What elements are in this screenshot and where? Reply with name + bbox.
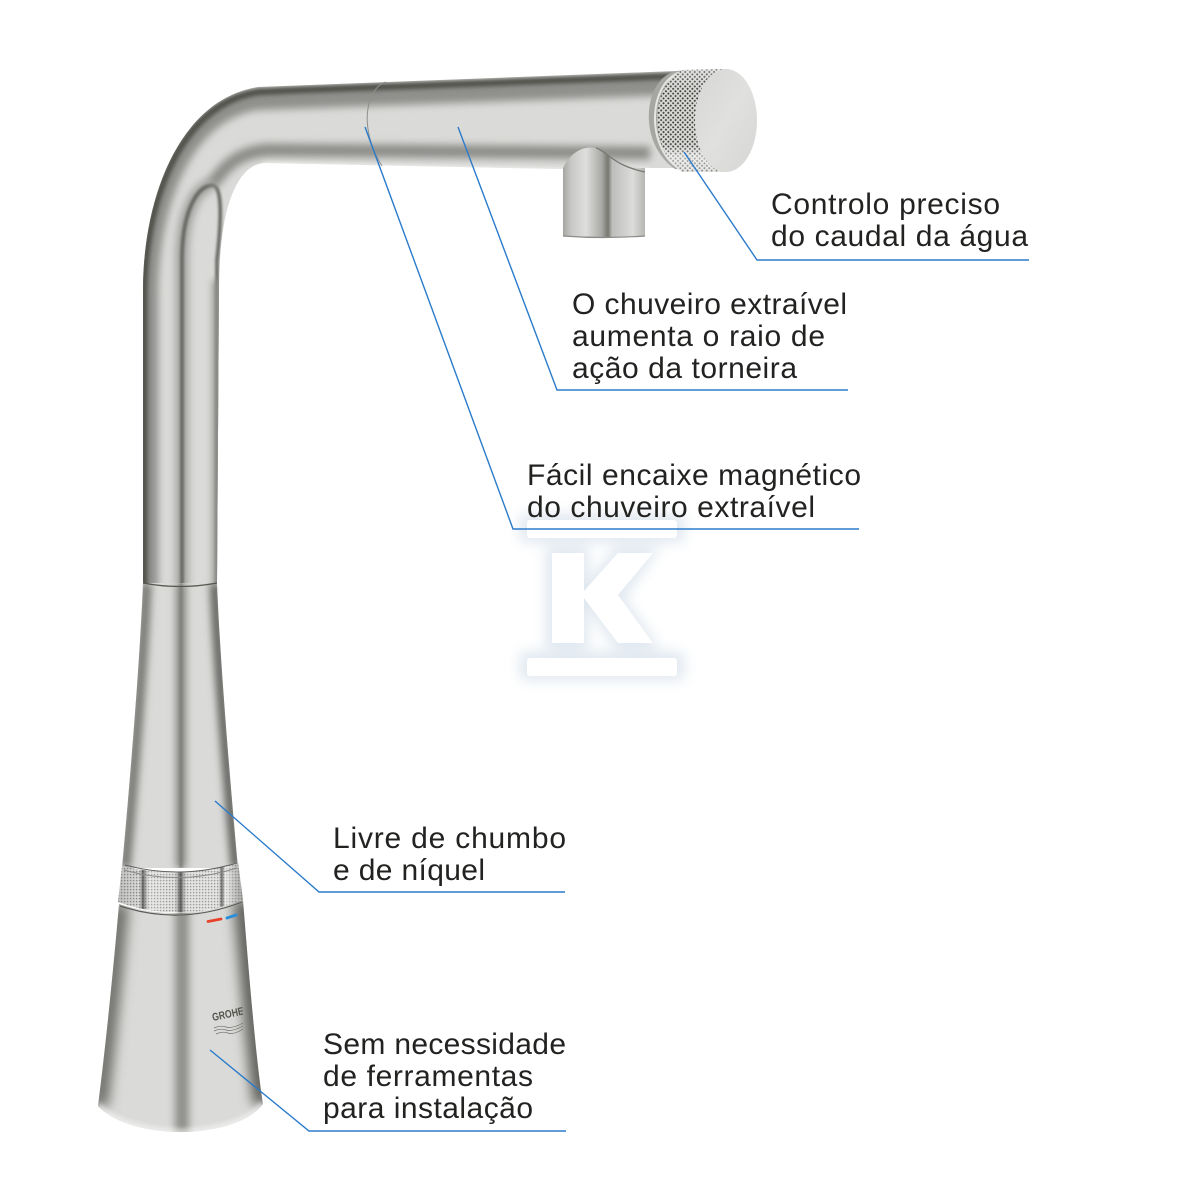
logo: GROHE: GROHE bbox=[211, 1006, 245, 1024]
callout: lead and nickel free: e de níquel bbox=[333, 854, 485, 887]
callout: tool-free installation bbox=[210, 1028, 566, 1131]
icon: hot indicator bbox=[208, 919, 221, 922]
callout: pull-out shower: aumenta o raio de bbox=[572, 320, 825, 353]
callout: flow control bbox=[684, 152, 1029, 260]
callout: tool-free installation: para instalação bbox=[323, 1092, 533, 1125]
faucet: flow control cap bbox=[695, 69, 757, 172]
callout: magnetic docking: do chuveiro extraível bbox=[527, 491, 815, 524]
faucet: knurled ring bbox=[118, 862, 243, 913]
callout: magnetic docking bbox=[365, 127, 861, 529]
faucet: tapered body bbox=[122, 583, 238, 868]
callout: lead and nickel free: Livre de chumbo bbox=[333, 822, 566, 855]
icon: cold indicator bbox=[227, 915, 236, 918]
faucet: upper tube with bend bbox=[143, 71, 676, 590]
callout: lead and nickel free bbox=[215, 801, 566, 892]
callout: pull-out shower: ação da torneira bbox=[572, 352, 797, 385]
callout: pull-out shower bbox=[458, 127, 848, 390]
watermark: K logo bbox=[520, 514, 684, 680]
callout: tool-free installation: de ferramentas bbox=[323, 1060, 533, 1093]
callout: magnetic docking: Fácil encaixe magnético bbox=[527, 459, 861, 492]
faucet: knurled flow control bbox=[649, 69, 757, 172]
callout: tool-free installation: Sem necessidade bbox=[323, 1028, 566, 1061]
callout: flow control: Controlo preciso bbox=[771, 188, 1000, 221]
faucet: pull-out spout outlet bbox=[563, 150, 645, 238]
faucet: conical base bbox=[98, 900, 263, 1135]
faucet bbox=[98, 69, 757, 1135]
callout: pull-out shower: O chuveiro extraível bbox=[572, 288, 847, 321]
callout: flow control: do caudal da água bbox=[771, 220, 1028, 253]
logo: GROHE bbox=[212, 1007, 243, 1034]
